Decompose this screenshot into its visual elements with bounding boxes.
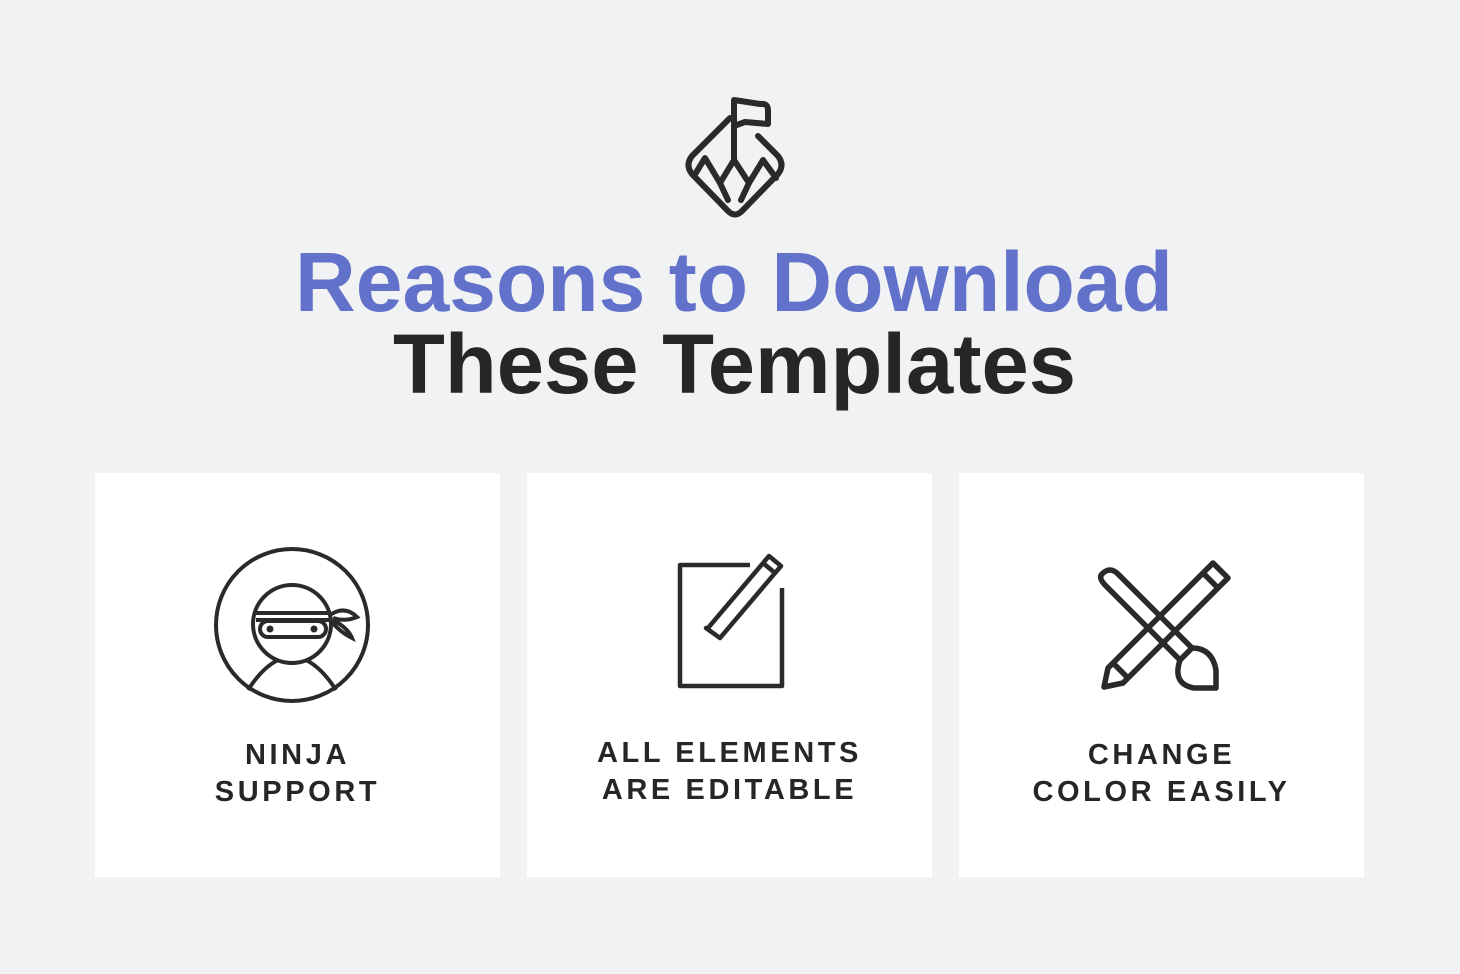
label: CHANGE <box>1088 739 1235 771</box>
label <box>597 737 862 806</box>
icon: ninja <box>214 547 370 703</box>
label: NINJA <box>245 739 350 771</box>
label: ARE EDITABLE <box>602 774 857 806</box>
subtitle: These Templates <box>393 317 1076 411</box>
label <box>1032 739 1291 808</box>
panel: change color easily <box>959 473 1364 877</box>
icon: edit <box>678 554 784 688</box>
label: ALL ELEMENTS <box>597 737 862 769</box>
label: COLOR EASILY <box>1032 776 1291 808</box>
title: Reasons to Download <box>295 235 1173 329</box>
label: SUPPORT <box>215 776 380 808</box>
label <box>215 739 380 808</box>
panel: all elements editable <box>527 473 932 877</box>
panel: ninja support <box>95 473 500 877</box>
icon: pencil and brush <box>1098 560 1231 691</box>
icon: mountain flag <box>295 97 1173 411</box>
